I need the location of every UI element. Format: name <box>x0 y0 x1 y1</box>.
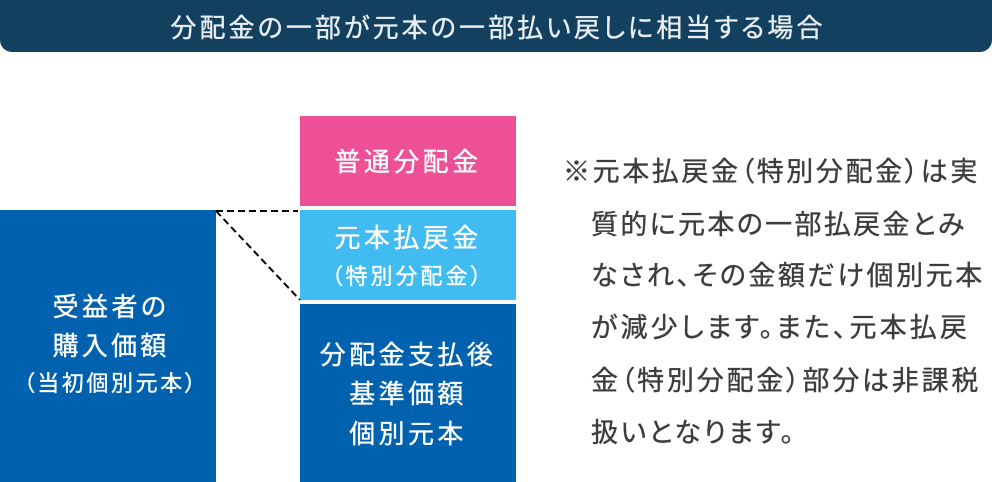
label: after distribution: 分配金支払後 <box>320 335 496 372</box>
note text <box>563 150 985 450</box>
label: ordinary distribution: 普通分配金 <box>334 142 482 179</box>
label: initial principal: （当初個別元本） <box>24 366 198 398</box>
panel: ordinary distribution <box>300 116 516 206</box>
panel: principal refund <box>300 210 516 300</box>
note line 4: が減少します。また、元本払戻 <box>591 306 970 345</box>
note line 6: 扱いとなります。 <box>591 411 796 450</box>
header bar <box>0 0 992 52</box>
panel: post-distribution NAV <box>300 304 516 482</box>
label: purchase price line 2: 購入価額 <box>53 326 169 363</box>
label: principal refund: 元本払戻金 <box>334 218 482 255</box>
label: special distribution: （特別分配金） <box>331 259 484 291</box>
label: individual principal: 個別元本 <box>349 414 467 451</box>
note line 2: 質的に元本の一部払戻金とみ <box>591 203 967 242</box>
panel: purchase price <box>0 210 216 482</box>
label: base price: 基準価額 <box>349 374 467 411</box>
label: purchase price: 受益者の <box>53 287 169 324</box>
note line 3: なされ、その金額だけ個別元本 <box>591 254 985 293</box>
note line 1: ※元本払戻金（特別分配金）は実 <box>563 150 980 189</box>
title: 分配金の一部が元本の一部払い戻しに相当する場合 <box>170 8 826 45</box>
note line 5: 金（特別分配金）部分は非課税 <box>591 359 981 398</box>
